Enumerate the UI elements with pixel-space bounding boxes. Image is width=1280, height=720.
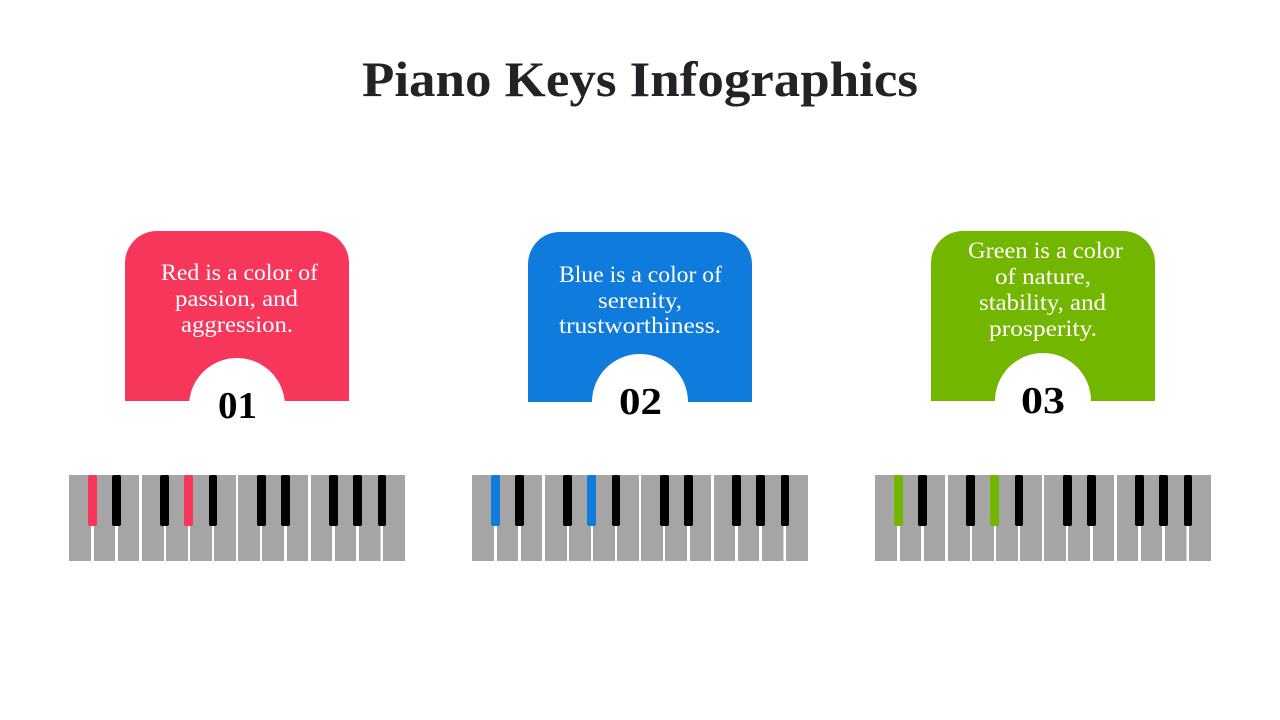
text: blue description — [559, 262, 722, 338]
circle badge: 03 — [995, 353, 1091, 449]
text: blue description: Blue is a color of — [559, 262, 722, 287]
panel: green card — [931, 231, 1155, 449]
text: red description: passion, and — [175, 286, 299, 311]
text: blue description: serenity, — [598, 288, 682, 313]
piano keyboard: blue — [472, 475, 808, 561]
card shape: green — [931, 231, 1155, 401]
piano keyboard: green — [875, 475, 1211, 561]
highlighted keys: green — [894, 475, 999, 526]
text: green description — [968, 238, 1123, 341]
number: 03: 03 — [1021, 380, 1065, 422]
title: Piano Keys Infographics — [362, 51, 918, 107]
text: green description: stability, and — [979, 290, 1107, 315]
highlighted keys: red — [88, 475, 193, 526]
highlighted keys: blue — [491, 475, 596, 526]
number: 02: 02 — [619, 381, 662, 423]
text: red description — [161, 260, 318, 337]
circle badge: 01 — [189, 358, 285, 454]
text: green description: Green is a color — [968, 238, 1123, 263]
piano keyboard: red — [69, 475, 405, 561]
card shape: red — [125, 231, 349, 401]
card shape: blue — [528, 232, 752, 402]
number: 01: 01 — [218, 385, 257, 427]
text: green description: prosperity. — [989, 316, 1097, 341]
circle badge: 02 — [592, 354, 688, 450]
text: red description: Red is a color of — [161, 260, 318, 285]
panel: red card — [125, 231, 349, 454]
panel: blue card — [528, 232, 752, 450]
text: green description: of nature, — [995, 264, 1091, 289]
text: blue description: trustworthiness. — [559, 313, 721, 338]
text: red description: aggression. — [181, 312, 293, 337]
